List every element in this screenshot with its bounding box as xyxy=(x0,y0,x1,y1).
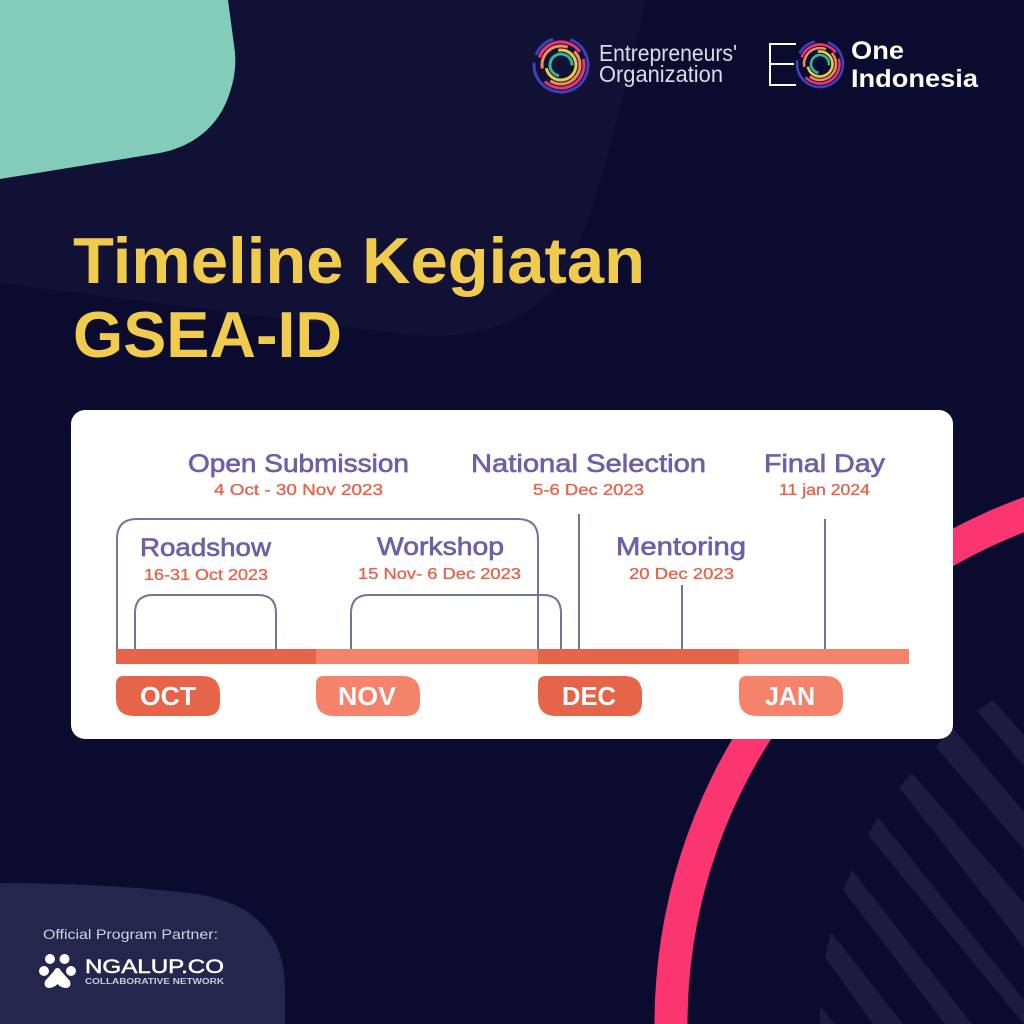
month: JAN xyxy=(739,676,843,716)
event: Final Day xyxy=(764,450,886,499)
Roadshow bracket xyxy=(135,595,276,650)
title: GSEA-ID xyxy=(73,298,342,371)
logo text: One xyxy=(851,37,904,65)
pink arc xyxy=(654,497,1024,1024)
Workshop bracket xyxy=(351,595,561,650)
event: Mentoring xyxy=(616,533,746,583)
month: DEC: DEC xyxy=(562,681,616,711)
background faint shape xyxy=(0,0,646,336)
icon: E letter xyxy=(770,44,796,85)
month: JAN: JAN xyxy=(765,681,815,711)
icon: paw logo xyxy=(39,954,76,988)
month: NOV: NOV xyxy=(338,681,397,711)
month: OCT: OCT xyxy=(140,681,196,711)
month: OCT xyxy=(116,676,220,716)
timeline bar xyxy=(116,649,909,664)
decorative stripes xyxy=(820,700,1024,1024)
Final Day marker xyxy=(824,519,826,650)
event: Roadshow: 16-31 Oct 2023 xyxy=(144,567,268,584)
partner name: NGALUP.CO xyxy=(85,957,224,978)
teal corner shape xyxy=(0,0,235,179)
event: National Selection xyxy=(471,450,706,499)
event: Mentoring: Mentoring xyxy=(616,533,746,561)
event: National Selection: National Selection xyxy=(471,450,706,478)
Open Submission bracket xyxy=(117,519,538,650)
event: Final Day: Final Day xyxy=(764,450,886,478)
event: Open Submission xyxy=(188,450,409,499)
event: National Selection: 5-6 Dec 2023 xyxy=(533,482,644,499)
logo: Entrepreneurs' Organization: Organization xyxy=(599,61,723,87)
month: DEC xyxy=(538,676,642,716)
partner label: Official Program Partner: xyxy=(43,926,218,942)
Mentoring marker xyxy=(681,585,683,650)
event: Open Submission: Open Submission xyxy=(188,450,409,478)
panel: timeline card xyxy=(71,410,953,739)
bottom-left partner panel xyxy=(0,883,285,1024)
title: Timeline Kegiatan xyxy=(73,224,645,297)
event: Final Day: 11 jan 2024 xyxy=(779,482,870,499)
event: Roadshow xyxy=(140,534,272,584)
title xyxy=(73,224,645,371)
icon: O rings xyxy=(791,35,849,93)
icon: EO rings xyxy=(526,30,596,100)
month: NOV xyxy=(316,676,420,716)
event: Mentoring: 20 Dec 2023 xyxy=(629,566,734,583)
event: Open Submission: 4 Oct - 30 Nov 2023 xyxy=(214,482,383,499)
event: Workshop xyxy=(358,533,521,583)
logo: EO One Indonesia: Indonesia xyxy=(851,65,979,93)
event: Roadshow: Roadshow xyxy=(140,534,272,562)
logo: EO One Indonesia xyxy=(770,35,979,93)
partner tagline: COLLABORATIVE NETWORK xyxy=(85,977,224,986)
logo: Entrepreneurs' Organization xyxy=(526,30,737,100)
logo text: Entrepreneurs' xyxy=(599,40,737,66)
National Selection marker xyxy=(578,514,580,650)
event: Workshop: 15 Nov- 6 Dec 2023 xyxy=(358,566,521,583)
event: Workshop: Workshop xyxy=(377,533,504,561)
